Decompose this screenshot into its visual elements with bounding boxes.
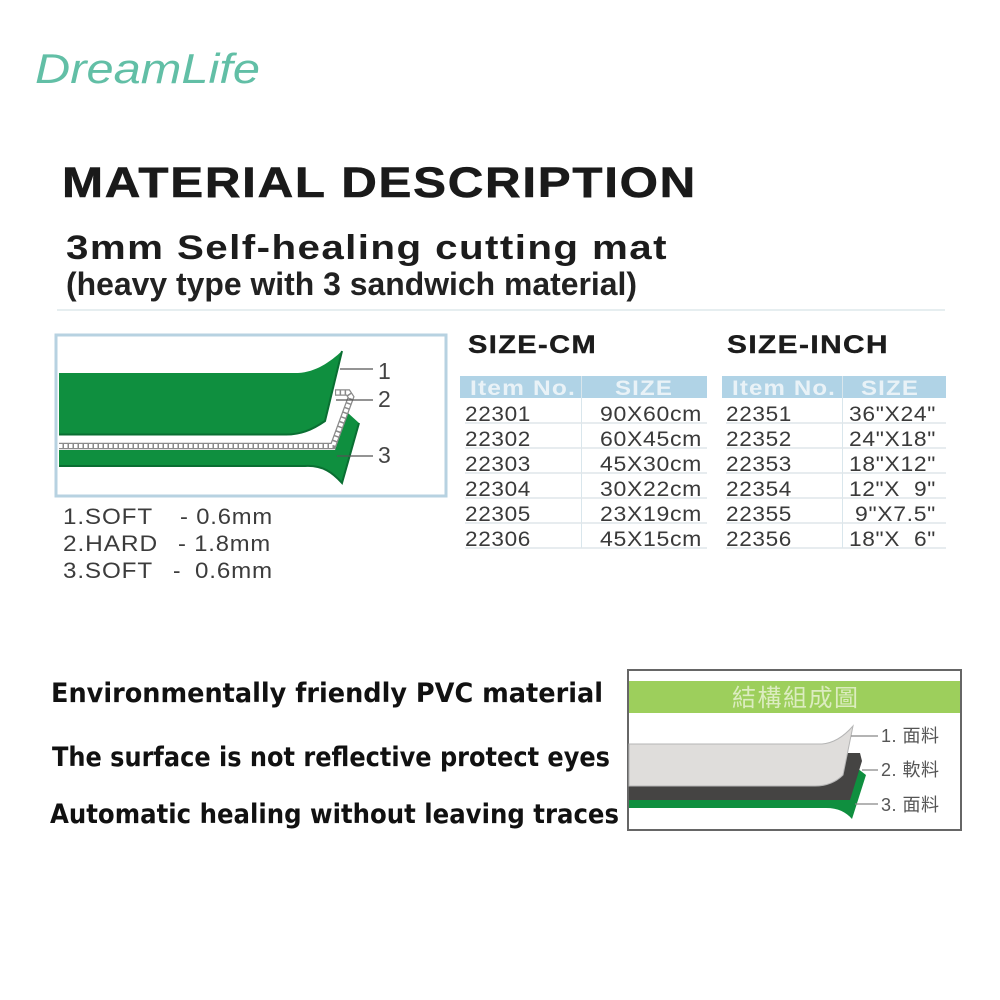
heading: size in inches: SIZE-INCH bbox=[727, 331, 889, 359]
table: sizes in cm: 22305 bbox=[465, 503, 531, 526]
table: sizes in cm: 22306 bbox=[465, 528, 531, 551]
legend: layer thicknesses: 1.SOFT bbox=[63, 504, 153, 529]
panel: structure diagram bbox=[628, 670, 961, 830]
legend: layer thicknesses: 3.SOFT bbox=[63, 558, 153, 583]
table: sizes in inches: 22351 bbox=[726, 403, 792, 426]
table: sizes in cm: 45X15cm bbox=[600, 528, 702, 551]
heading: size in cm: SIZE-CM bbox=[468, 331, 597, 359]
layer numbers bbox=[378, 358, 391, 468]
layer numbers: 3 bbox=[378, 442, 391, 468]
table: sizes in inches: SIZE bbox=[861, 377, 919, 400]
legend: layer thicknesses bbox=[63, 504, 273, 583]
table: sizes in cm: 22303 bbox=[465, 453, 531, 476]
table: sizes in inches: 18"X12" bbox=[849, 453, 936, 476]
legend: layer thicknesses: - 0.6mm bbox=[180, 504, 273, 529]
table: sizes in inches: Item No. bbox=[732, 377, 836, 400]
table: sizes in inches bbox=[722, 376, 946, 551]
table: sizes in inches: 36"X24" bbox=[849, 403, 936, 426]
layer numbers: 2 bbox=[378, 386, 391, 412]
bottom green layer bbox=[629, 768, 866, 819]
legend: layer thicknesses: 2.HARD bbox=[63, 531, 158, 556]
table: sizes in inches: 22356 bbox=[726, 528, 792, 551]
feature: PVC material: Environmentally friendly PVC material bbox=[51, 678, 603, 709]
table: sizes in cm: 45X30cm bbox=[600, 453, 702, 476]
table: sizes in inches: 22353 bbox=[726, 453, 792, 476]
feature: self-healing: Automatic healing without leaving traces bbox=[50, 799, 619, 830]
table: sizes in cm: Item No. bbox=[470, 377, 576, 400]
leader lines bbox=[336, 369, 373, 456]
logo: DreamLife: DreamLife bbox=[35, 45, 260, 92]
table: sizes in cm: 22302 bbox=[465, 428, 531, 451]
table: sizes in cm: 60X45cm bbox=[600, 428, 702, 451]
panel: layer cross-section diagram bbox=[56, 335, 446, 496]
layer labels: 1. 面料 bbox=[881, 726, 939, 746]
legend: layer thicknesses: - 1.8mm bbox=[178, 531, 271, 556]
legend: layer thicknesses: - bbox=[173, 558, 181, 583]
dark core layer bbox=[629, 753, 862, 800]
table: sizes in inches: 24"X18" bbox=[849, 428, 936, 451]
table: sizes in cm: 22301 bbox=[465, 403, 531, 426]
table: sizes in cm: 30X22cm bbox=[600, 478, 702, 501]
layer numbers: 1 bbox=[378, 358, 391, 384]
subtitle: 3mm Self-healing cutting mat bbox=[66, 229, 668, 267]
table: sizes in inches: 22354 bbox=[726, 478, 792, 501]
table: sizes in cm bbox=[460, 376, 707, 551]
layer labels: 2. 軟料 bbox=[881, 760, 939, 780]
table: sizes in inches: 9"X7.5" bbox=[855, 503, 936, 526]
table: sizes in cm: 23X19cm bbox=[600, 503, 702, 526]
top grey layer bbox=[629, 726, 853, 786]
layer labels bbox=[881, 726, 939, 815]
leader lines bbox=[851, 736, 878, 804]
table: sizes in inches: 22352 bbox=[726, 428, 792, 451]
layer 1: top green soft layer bbox=[59, 351, 342, 435]
table: sizes in cm: 90X60cm bbox=[600, 403, 702, 426]
layer 3: bottom green soft layer bbox=[59, 413, 359, 483]
legend: layer thicknesses: 0.6mm bbox=[195, 558, 273, 583]
layer 2: hard hatched core bbox=[59, 392, 351, 446]
table: sizes in inches: 12"X 9" bbox=[849, 478, 936, 501]
green header band bbox=[629, 681, 960, 713]
table: sizes in inches: 22355 bbox=[726, 503, 792, 526]
header text: 結構組成圖 bbox=[732, 685, 858, 712]
table: sizes in cm: 22304 bbox=[465, 478, 531, 501]
title: MATERIAL DESCRIPTION bbox=[62, 159, 697, 207]
table: sizes in inches: 18"X 6" bbox=[849, 528, 936, 551]
layer labels: 3. 面料 bbox=[881, 795, 939, 815]
feature: non-reflective surface: The surface is not reflective protect eyes bbox=[52, 742, 610, 773]
table: sizes in cm: SIZE bbox=[615, 377, 673, 400]
subtitle note: (heavy type with 3 sandwich material) bbox=[66, 266, 637, 302]
